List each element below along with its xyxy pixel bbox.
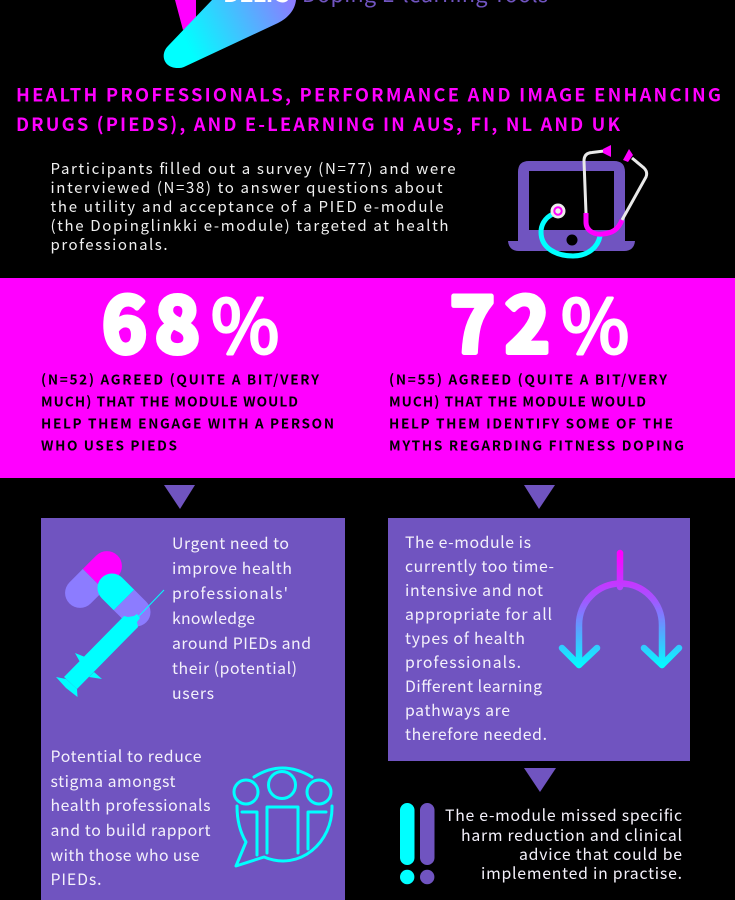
text: reduce stigma: PIEDs. (50, 867, 102, 890)
icon: pills and syringe (56, 545, 164, 697)
text: missed harm reduction advice: harm reduction and clinical (461, 823, 682, 846)
intro text: interviewed (N=38) to answer questions about (50, 177, 443, 198)
stat: 68 percent: 68 (102, 264, 200, 374)
arrow: right down (524, 485, 555, 509)
icon: laptop with stethoscope (508, 145, 647, 256)
text: urgent need: around PIEDs and (172, 631, 311, 654)
text: reduce stigma: health professionals (50, 793, 210, 816)
text: e-module too time-intensive: currently too time- (405, 554, 554, 577)
stat: 72 percent (389, 264, 684, 454)
text: e-module too time-intensive: types of health (405, 626, 525, 649)
intro text: professionals. (50, 234, 168, 255)
text: reduce stigma: and to build rapport (50, 818, 211, 841)
stat: 68 percent (41, 264, 334, 454)
panel: left findings (41, 518, 345, 900)
text: missed harm reduction advice: implemented in practise. (481, 861, 682, 884)
text: reduce stigma: Potential to reduce (50, 744, 202, 767)
text: missed harm reduction advice: advice that could be (519, 842, 682, 865)
intro text: Participants filled out a survey (N=77) and were (50, 158, 456, 179)
logo (164, 0, 548, 68)
text: reduce stigma: stigma amongst (50, 769, 176, 792)
text: urgent need: Urgent need to (172, 531, 289, 554)
text: urgent need: knowledge (172, 606, 255, 629)
intro text: the utility and acceptance of a PIED e-module (50, 196, 444, 217)
text: urgent need: improve health (172, 556, 292, 579)
icon: people in speech bubble (234, 768, 332, 866)
stat: 72 percent: HELP THEM IDENTIFY SOME OF THE (389, 412, 673, 432)
text: e-module too time-intensive: therefore needed. (405, 722, 547, 745)
stat: 68 percent: HELP THEM ENGAGE WITH A PERSON (41, 412, 334, 432)
icon: splitting arrows (562, 553, 679, 665)
stat: 68 percent: (N=52) AGREED (QUITE A BIT/VERY (41, 368, 319, 388)
text: reduce stigma (50, 744, 211, 890)
text: e-module too time-intensive: Different learning (405, 674, 542, 697)
stat: 72 percent: % (561, 268, 629, 375)
text: e-module too time-intensive: pathways are (405, 698, 510, 721)
panel: right findings (388, 518, 690, 761)
stat: 72 percent: MYTHS REGARDING FITNESS DOPING (389, 434, 684, 454)
icon: exclamation marks (400, 803, 434, 884)
text: urgent need (172, 531, 311, 704)
text: e-module too time-intensive: professionals. (405, 650, 521, 673)
text: e-module too time-intensive: The e-module is (405, 530, 531, 553)
text: urgent need: users (172, 681, 214, 704)
panel: statistics band (0, 264, 735, 478)
arrow: lower right down (524, 768, 556, 792)
text: e-module too time-intensive: intensive and not (405, 578, 543, 601)
stat: 68 percent: % (211, 268, 279, 375)
stat: 72 percent: MUCH) THAT THE MODULE WOULD (389, 390, 646, 410)
stat: 68 percent: WHO USES PIEDS (41, 434, 177, 454)
intro text: (the Dopinglinkki e-module) targeted at health (50, 215, 448, 236)
text: reduce stigma: with those who use (50, 843, 200, 866)
intro text (50, 158, 456, 255)
text: missed harm reduction advice: The e-module missed specific (445, 803, 682, 826)
title: HEALTH PROFESSIONALS, PERFORMANCE AND IMAGE ENHANCING (16, 82, 721, 108)
text: e-module too time-intensive (405, 530, 554, 745)
text: urgent need: their (potential) (172, 656, 297, 679)
arrow: left down (164, 485, 195, 509)
logo icon (164, 0, 296, 68)
stat: 72 percent: 72 (450, 264, 550, 374)
title: DRUGS (PIEDS), AND E-LEARNING IN AUS, FI, NL AND UK (16, 111, 620, 137)
text: urgent need: professionals' (172, 581, 288, 604)
stat: 68 percent: MUCH) THAT THE MODULE WOULD (41, 390, 298, 410)
text: missed harm reduction advice (445, 803, 682, 884)
stat: 72 percent: (N=55) AGREED (QUITE A BIT/VERY (389, 368, 667, 388)
text: e-module too time-intensive: appropriate for all (405, 602, 552, 625)
title (16, 82, 721, 137)
